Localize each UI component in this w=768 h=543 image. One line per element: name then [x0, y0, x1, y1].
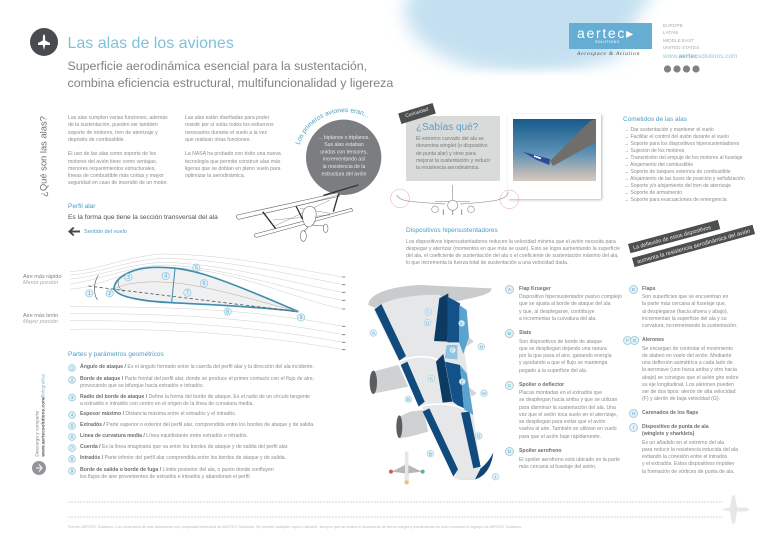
parts: numbered markers	[68, 364, 76, 475]
device B: que se despliegan dejando una ranura	[519, 346, 607, 352]
device F G	[623, 336, 739, 402]
dispositivos text	[406, 238, 620, 266]
device E: Flaps	[642, 286, 655, 292]
parts list: Radio del borde de ataque / Define la forma del borde de ataque. Es el radio de un círculo tangente	[80, 394, 310, 400]
device D	[505, 447, 620, 470]
logo tagline: Aerospace & Aviation	[577, 51, 640, 57]
intro text column 2: ligeras que se doblan en pleno vuelo para	[185, 166, 280, 172]
numbered markers: 1	[88, 291, 91, 297]
download text rotated: www.aertecsolutions.com/infografías	[40, 374, 46, 457]
airflow labels upper	[23, 274, 62, 286]
device D: más cercana al fuselaje del avión.	[519, 464, 596, 470]
sabias que heading: ¿Sabías qué?	[416, 122, 478, 133]
device F G: abajo) se consigue que el avión gire sobre	[642, 374, 739, 380]
subtitle	[68, 58, 394, 90]
device F G: (F) y alerón de baja velocidad (G).	[642, 396, 720, 402]
box: sabias que	[406, 116, 500, 181]
footer plane trail	[68, 496, 749, 524]
cometidos list: → Soporte y/o alojamiento del tren de aterrizaje	[624, 183, 731, 189]
circle text	[318, 135, 370, 177]
intro text column 2: que realizan otras funciones.	[185, 137, 251, 143]
wing diagram: F	[451, 348, 454, 353]
circle text: incrementando así	[323, 157, 366, 163]
circle text: estructura del avión	[322, 171, 367, 177]
device B: pegado a la superficie del ala.	[519, 368, 587, 374]
intro text column 2	[185, 115, 281, 179]
biplane drawing	[236, 185, 358, 241]
device C: C	[508, 383, 511, 388]
parts list: Borde de salida o borde de fuga / Límite posterior del ala, o punto donde confluyen	[80, 467, 274, 473]
parts list: Cuerda / Es la línea imaginaria que va entre los bordes de ataque y de salida del perfil alar.	[80, 444, 289, 450]
device B: B	[508, 331, 511, 336]
airflow labels lower	[23, 313, 58, 325]
device C: vez que el avión toca suelo en el aterrizaje,	[519, 412, 618, 418]
device E: Son superficies que se encuentran en	[642, 294, 728, 300]
wing separators	[399, 357, 464, 409]
device I: la formación de vórtices de punta de ala.	[642, 468, 735, 474]
regions list: LATAM	[663, 30, 678, 35]
intro text column 1: depósito de combustible.	[68, 137, 125, 143]
numbered markers: 3	[127, 275, 130, 281]
download text rotated	[35, 374, 46, 457]
cometidos list: → Sujeción de los motores	[624, 148, 684, 154]
wing diagram: B	[407, 397, 410, 402]
device F G: ser de dos tipos: alerón de alta velocidad	[642, 389, 735, 395]
device F G: su eje longitudinal. Los alerones pueden	[642, 382, 734, 388]
parts: numbered markers: 6	[71, 435, 74, 440]
device C: para que el avión baje rápidamente.	[519, 434, 601, 440]
parts list: Borde de ataque / Parte frontal del perfil alar, donde se produce el primer contacto con el flujo de aire,	[80, 376, 314, 382]
parts list: Línea de curvatura media / Línea equidistante entre extradós e intradós.	[80, 433, 248, 439]
parts list: Ángulo de ataque / Es el ángulo formado entre la cuerda del perfil alar y la dirección del ala incidente.	[80, 364, 314, 370]
intro text column 2: La NASA ha probado con éxito una nueva	[185, 151, 281, 157]
cometidos list: → Alojamiento del combustible	[624, 162, 693, 168]
sky and clouds background	[396, 0, 658, 74]
parts list: los flujos de aire provenientes de extradós e intradós y abandonan el perfil.	[80, 474, 251, 480]
intro text column 1: El uso de las alas como soporte de los	[68, 151, 156, 157]
circle text: Sus alas estaban	[324, 142, 364, 148]
sabias que text: mejorar la sustentación y reducir	[416, 158, 490, 164]
device I: para reducir la resistencia inducida del ala	[642, 447, 738, 453]
curved heading: Los primeros aviones eran...	[295, 108, 368, 144]
banners: deflexion: aumenta la resistencia aerodinámica del avión	[637, 229, 751, 265]
heading: dispositivos hipersustentadores: Dispositivos hipersustentadores	[406, 227, 498, 234]
device A: a incrementar la curvatura del ala.	[519, 316, 597, 322]
subheading: perfil alar: Perfil alar	[68, 203, 95, 210]
sabias que text: de punta alar) y sirve para	[416, 150, 476, 156]
small plane locator	[389, 452, 425, 484]
upper flap and spoilers	[434, 293, 448, 342]
cometidos list: → Facilitar el control del avión durante el vuelo	[624, 134, 729, 140]
parts list	[68, 363, 315, 480]
device C: se despliegan hacia arriba y que se utilizan	[519, 397, 617, 403]
wing diagram: B	[429, 451, 432, 456]
numbered markers	[86, 264, 305, 321]
intro text column 1: seguridad en caso de incendio de un motor.	[68, 180, 168, 186]
device F G: G	[633, 338, 636, 343]
winglet	[459, 452, 493, 479]
numbered markers: 2	[108, 291, 111, 297]
cometidos list: → Dar sustentación y mantener el vuelo	[624, 127, 714, 133]
device C	[505, 381, 618, 440]
wing diagram: G	[477, 434, 481, 439]
subtitle: combina eficiencia estructural, multifuncionalidad y ligereza	[68, 76, 393, 90]
intro text column 1: motores del avión tiene como ventajas,	[68, 158, 157, 164]
regions list: UNITED STATES	[663, 45, 699, 50]
device C: se despliegan para evitar que el avión	[519, 419, 606, 425]
device E: curvatura, incrementando la sustentación.	[642, 323, 737, 329]
device F G: Alerones	[642, 337, 664, 343]
footer source note: Fuente: AERTEC Solutions. Los contenidos de este documento son propiedad intelectual de AERTEC Solutions. Se permite cualquier copia o difusión, siempre que se realice el documento de forma íntegra y manteniendo en todo momento el logotipo de AERTEC Solutions.	[68, 525, 522, 529]
dispositivos text: del ala, el coeficiente de sustentación del ala o el coeficiente de sustentación máximo del ala,	[406, 253, 619, 259]
device I: I	[633, 425, 634, 430]
section heading rotated: ¿Qué son las alas?	[38, 116, 48, 196]
device F G: una deflexión asimétrica a cada lado de	[642, 360, 733, 366]
photo frame with winglet	[508, 114, 604, 202]
airfoil diagram	[70, 254, 346, 350]
cometidos list: → Soporte para evacuaciones de emergencia	[624, 197, 727, 203]
cometidos list	[624, 127, 745, 203]
tag: curiosidad: Curiosidad	[405, 107, 429, 119]
device E: incrementan la superficie del ala y su	[642, 316, 727, 322]
icon: plane in dark circle	[30, 28, 58, 56]
title: Las alas de los aviones	[68, 35, 234, 52]
flight direction label: Sentido del vuelo	[84, 229, 127, 235]
subtitle: Superficie aerodinámica esencial para la sustentación,	[68, 58, 367, 72]
numbered markers: 8	[226, 309, 229, 315]
device F G: Se encargan de controlar el movimiento	[642, 346, 733, 352]
device I: evitando la conexión entre el intradós	[642, 454, 727, 460]
dispositivos text: Los dispositivos hipersustentadores reducen la velocidad mínima que el avión necesita para	[406, 238, 616, 244]
intro text column 1: soporte de motores, tren de aterrizaje y	[68, 130, 158, 136]
circle text: unidas con tensores,	[320, 149, 368, 155]
intro text column 2: necesarios durante el vuelo a la vez	[185, 130, 267, 136]
airflow labels upper: Aire más rápido	[23, 274, 62, 280]
parts list: provocando que se bifurque hacia extradós e intradós.	[80, 383, 204, 389]
heading: partes y parametros: Partes y parámetros geométricos	[68, 351, 164, 358]
intro text column 1	[68, 115, 168, 186]
callout: first airplanes circle with biplane	[236, 108, 382, 242]
device I: Es un añadido en el extremo del ala	[642, 440, 724, 446]
parts: numbered markers: 2	[71, 378, 74, 383]
slats and krueger	[375, 304, 481, 477]
parts: numbered markers: 7	[71, 446, 74, 451]
wing diagram: A	[372, 331, 376, 336]
regions list: MIDDLE EAST	[663, 38, 694, 43]
engines	[373, 365, 428, 438]
arrow: sentido del vuelo	[68, 227, 80, 236]
device B: Son dispositivos de borde de ataque	[519, 338, 602, 344]
airfoil shape	[114, 267, 298, 312]
cometidos list: → Soporte de armamento	[624, 190, 682, 196]
dispositivos text: despegar y aterrizar (momentos en que más se usan). Esto se logra aumentando la superficie	[406, 246, 620, 252]
device D: D	[508, 449, 511, 454]
wing diagram: C	[427, 310, 431, 315]
logo: aertec solutions	[569, 23, 652, 49]
aircraft front view with winglets highlighted	[390, 185, 519, 215]
device H: H	[632, 411, 635, 416]
device B	[505, 329, 612, 374]
sabias que text: El extremo curvado del ala se	[416, 136, 484, 142]
parts list: Extradós / Parte superior o exterior del perfil alar, comprendida entre los bordes de ataque y de salida.	[80, 422, 315, 428]
device F G: de alabeo en vuelo del avión. Mediante	[642, 353, 731, 359]
social icons	[664, 65, 700, 73]
parts list: Espesor máximo / Distancia máxima entre el extradós y el intradós.	[80, 411, 236, 417]
parts: numbered markers: 9	[71, 469, 74, 474]
wing diagram: E	[460, 321, 463, 326]
device B: y ayudando a que el flujo se mantenga	[519, 360, 607, 366]
numbered markers: 4	[164, 274, 167, 280]
device A: Dispositivo hipersustentador pasivo complejo	[519, 294, 622, 300]
device F G: la aeronave (uno hacia arriba y otro hacia	[642, 367, 737, 373]
device A	[505, 285, 622, 322]
device E	[629, 285, 737, 329]
dispositivos text: lo que incrementa la fuerza total de sustentación a una velocidad dada.	[406, 260, 568, 266]
wing diagram: E	[461, 379, 464, 384]
sabias que text: denomina winglet (o dispositivo	[416, 143, 487, 149]
device E: la parte más cercana al fuselaje que,	[642, 301, 726, 307]
download text rotated: Descarga y comparte	[35, 411, 40, 457]
perfil alar definition: Es la forma que tiene la sección transversal del ala	[68, 214, 218, 221]
device C: para disminuir la sustentación del ala. Una	[519, 404, 616, 410]
regions list	[663, 23, 699, 50]
intro text column 1: de la sustentación, pueden ser también	[68, 122, 158, 128]
device F G: F	[626, 338, 629, 343]
device A: A	[508, 287, 511, 292]
device C: vuelva al aire. También se utilizan en vuelo	[519, 426, 617, 432]
numbered markers: 6	[203, 281, 206, 287]
device I: Dispositivo de punta de ala	[642, 424, 709, 430]
fuselage edge	[368, 285, 492, 310]
device I	[629, 423, 738, 474]
intro text column 1: Las alas cumplen varias funciones, además	[68, 115, 168, 121]
parts: numbered markers: 4	[71, 413, 74, 418]
parts list: a extradós e intradós con centro en el origen de la línea de curvatura media.	[80, 401, 254, 407]
flap fairings	[463, 335, 477, 397]
device I: y el extradós. Estos dispositivos impiden	[642, 461, 734, 467]
icon: share button	[32, 461, 46, 475]
intro text column 2: tecnología que permite construir alas más	[185, 158, 280, 164]
wing diagram: H	[480, 344, 483, 349]
flow arrow ticks	[342, 277, 345, 350]
airflow labels lower: Mayor presión	[23, 319, 58, 325]
intro text column 2: Las alas están diseñadas para poder	[185, 115, 269, 121]
cometidos list: → Soporte para los dispositivos hipersustentadores	[624, 141, 739, 147]
sabias que text	[416, 136, 490, 171]
parts: numbered markers: 8	[71, 457, 74, 462]
wing diagram: H	[482, 391, 486, 396]
device C: Placas montadas en el extradós que	[519, 390, 602, 396]
logo: aertec solutions: SOLUTIONS	[595, 40, 619, 44]
device D: Spoiler aerofreno	[519, 448, 562, 454]
wing diagram: D	[426, 320, 430, 325]
numbered markers: 9	[300, 315, 303, 321]
airflow labels lower: Aire más lento	[23, 313, 58, 319]
numbered markers: 5	[195, 265, 198, 271]
intro text column 2: resistir por sí solas todos los esfuerzos	[185, 122, 274, 128]
numbered markers: 7	[186, 290, 189, 296]
parts: numbered markers: 5	[71, 424, 74, 429]
wing diagram: I	[495, 474, 496, 479]
sabias que text: la resistencia aerodinámica.	[416, 165, 480, 171]
device A: y que, al desplegarse, contribuye	[519, 308, 594, 314]
intro text column 2: optimizar la aerodinámica.	[185, 173, 245, 179]
device C: Spoiler o deflector	[519, 382, 564, 388]
device H	[629, 409, 698, 418]
intro text column 1: líneas de combustible más cortas y mayor	[68, 173, 164, 179]
device E: al desplegarse (hacia afuera y abajo),	[642, 308, 728, 314]
airflow labels upper: Menor presión	[23, 280, 58, 286]
circle text: la resistencia de la	[323, 164, 365, 170]
banners: deflexion	[628, 220, 755, 268]
parts list: Intradós / Parte inferior del perfil alar comprendida entre los bordes de ataque y de salida.	[80, 455, 286, 461]
website url: www.aertecsolutions.com	[663, 53, 737, 60]
device B: Slats	[519, 330, 531, 336]
device D: El spoiler aerofreno está ubicado en la parte	[519, 457, 620, 463]
device I: (winglets y sharklets)	[642, 431, 694, 437]
regions list: EUROPE	[663, 23, 683, 28]
letter markers	[370, 309, 499, 480]
logo: aertec solutions: aertec▸	[577, 25, 635, 41]
heading: cometidos de las alas: Cometidos de las alas	[623, 116, 687, 123]
banners: deflexion: La deflexión de estos dispositivos	[633, 225, 712, 251]
intro text column 1: menores requerimientos estructurales,	[68, 166, 156, 172]
wing diagram	[368, 285, 500, 484]
device A: que se ajusta al borde de ataque del ala	[519, 301, 610, 307]
circle text: ... biplanos o triplanos.	[318, 135, 370, 141]
wing diagram: C	[430, 376, 434, 381]
lower flap and spoilers	[436, 354, 452, 403]
device H: Carenados de los flaps	[642, 410, 698, 416]
device B: por la que pasa el aire, ganando energía	[519, 353, 612, 359]
cometidos list: → Transmisión del empuje de los motores al fuselaje	[624, 155, 742, 161]
parts: numbered markers: 3	[71, 395, 74, 400]
cometidos list: → Soporte de tanques externos de combustible	[624, 169, 731, 175]
device E: E	[632, 287, 635, 292]
parts: numbered markers: 1	[71, 366, 74, 371]
device A: Flap Krueger	[519, 286, 551, 292]
cometidos list: → Alojamiento de las luces de posición y señalización	[624, 176, 745, 182]
tag: curiosidad	[398, 103, 436, 124]
